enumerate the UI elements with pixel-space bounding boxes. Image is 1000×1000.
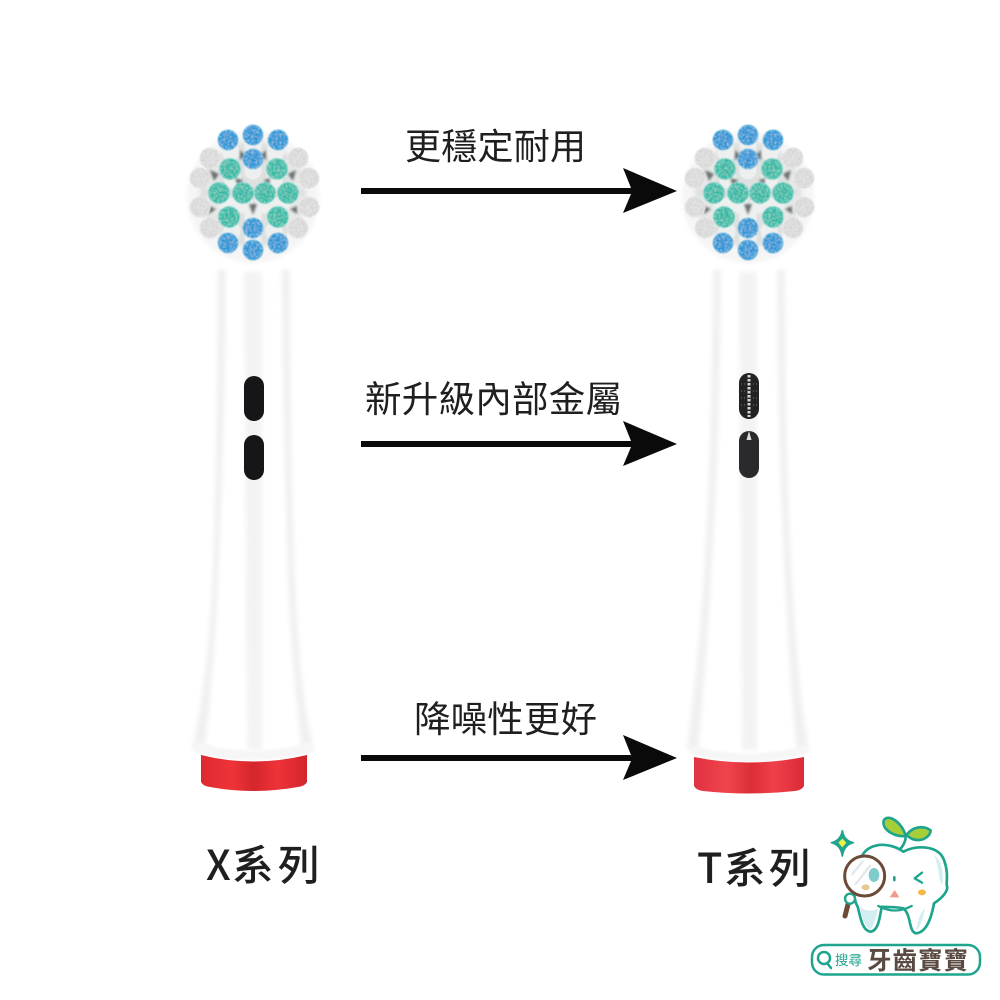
label: more stable: 更穩定耐用 — [405, 118, 586, 170]
T series mesh slot — [739, 373, 759, 419]
caption: T series: T系列 — [697, 835, 811, 895]
X series lower slot — [244, 435, 264, 480]
X series collar — [194, 741, 312, 760]
label: better noise reduction: 降噪性更好 — [414, 690, 597, 743]
T series brush head — [682, 124, 814, 794]
X series bristle head — [187, 124, 320, 263]
icon: cheek — [918, 889, 926, 895]
T series lower slot — [739, 431, 759, 478]
icon: smile — [878, 906, 912, 910]
icon: magnifying glass — [845, 856, 885, 916]
brand name: 牙齒寶寶 — [867, 942, 968, 977]
X series handle — [192, 270, 314, 750]
icon: wink — [915, 873, 922, 883]
arrow 3 — [361, 735, 677, 780]
arrow 2 — [361, 421, 677, 466]
T series red ring — [694, 757, 804, 794]
T series bristle head — [682, 124, 814, 263]
arrow 1 — [361, 168, 677, 213]
icon: sparkle — [831, 831, 853, 856]
X series red ring — [201, 755, 307, 791]
icon: tooth body — [854, 845, 947, 933]
search label: 搜尋 — [835, 949, 862, 969]
logo: tooth mascot — [831, 818, 947, 933]
icon: search — [818, 952, 831, 968]
label: upgraded inner metal: 新升級內部金屬 — [365, 370, 622, 423]
T series collar — [690, 745, 807, 762]
icon: tooth shading — [860, 855, 943, 931]
X series brush head — [187, 124, 320, 791]
logo: search pill — [812, 942, 980, 977]
icon: eye — [893, 876, 896, 881]
X series upper slot — [244, 376, 264, 421]
icon: nose — [890, 890, 899, 897]
icon: sprout leaves — [883, 818, 931, 859]
caption: X series: X系列 — [206, 832, 320, 892]
T series handle — [687, 270, 809, 750]
